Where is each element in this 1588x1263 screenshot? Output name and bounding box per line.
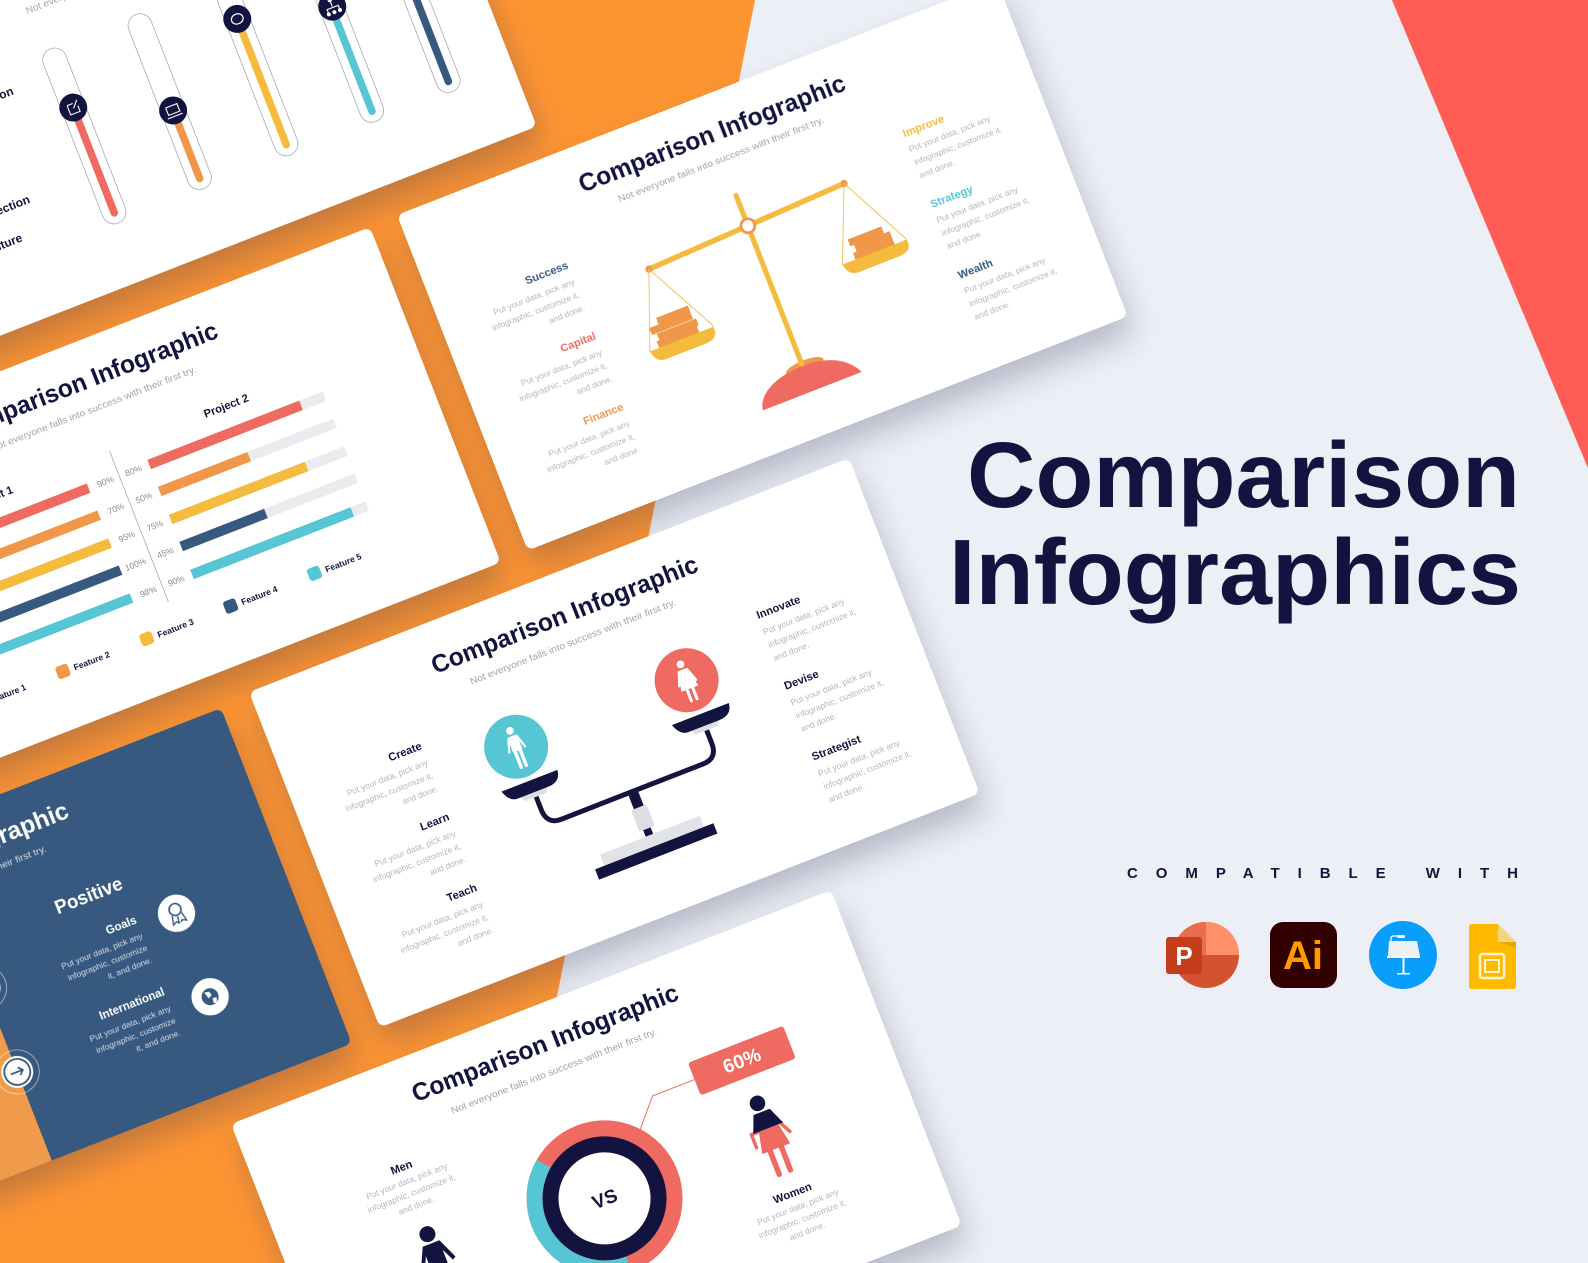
strategy text: Put your data, pick any xyxy=(935,184,1020,225)
panel: positive blue slide xyxy=(0,708,352,1263)
teach text: Teach xyxy=(445,882,479,905)
panel: people balance slide: Not everyone falls into success with their first try. xyxy=(469,597,678,687)
slider 5 xyxy=(373,0,464,96)
icon: woman figure xyxy=(739,1089,803,1178)
panel: coin balance slide xyxy=(397,0,1128,550)
create text: Put your data, pick any xyxy=(345,757,430,798)
create text: infographic, customize it, xyxy=(344,770,434,814)
icon: arrow circle xyxy=(0,1043,46,1100)
icon: globe xyxy=(186,973,234,1021)
project 1 values: 70% xyxy=(106,501,126,516)
slider 1 xyxy=(37,44,131,228)
icon: woman in red circle xyxy=(645,639,728,722)
heading: Comparison Infographic xyxy=(408,979,683,1108)
finance text: Put your data, pick any xyxy=(547,418,632,459)
callout: 60%: 60% xyxy=(720,1044,764,1078)
finance text: Finance xyxy=(582,401,625,428)
teach text: infographic, customize it, xyxy=(399,912,490,955)
legend xyxy=(0,549,363,713)
project 1 values: 95% xyxy=(117,529,137,544)
devise text: infographic, customize it, xyxy=(794,677,885,721)
balance scale xyxy=(501,703,771,901)
men text: and done. xyxy=(397,1194,436,1217)
success text: infographic, customize it, xyxy=(490,290,581,333)
project 2 values: 50% xyxy=(134,490,154,505)
goals text: Goals xyxy=(104,915,139,938)
strategy text xyxy=(929,166,1036,251)
left pan xyxy=(622,255,714,351)
strategy text: infographic, customize it, xyxy=(940,195,1031,238)
innovate text: Put your data, pick any xyxy=(762,596,846,637)
panel: men vs women slide xyxy=(231,890,962,1263)
men text: Put your data, pick any xyxy=(365,1160,450,1201)
learn text: Learn xyxy=(418,811,451,834)
panel: men vs women slide: Not everyone falls into success with their first try. xyxy=(450,1026,659,1117)
title: Comparison xyxy=(967,423,1520,527)
strategist text: Strategist xyxy=(810,733,863,763)
finance text xyxy=(534,401,642,488)
create text xyxy=(332,740,440,827)
teach text: Put your data, pick any xyxy=(400,899,485,940)
coin scale xyxy=(608,143,946,441)
capital text: Capital xyxy=(559,331,598,355)
donut chart xyxy=(504,1097,706,1263)
project 2 values xyxy=(124,463,186,588)
wealth text: and done. xyxy=(973,299,1012,322)
improve text: and done. xyxy=(918,157,956,180)
project 1 values: 98% xyxy=(138,584,158,599)
strategist text: Put your data, pick any xyxy=(817,737,902,778)
project 2 values: 90% xyxy=(166,573,186,588)
icon: Google Slides xyxy=(1469,924,1516,989)
goals text: Put your data, pick any xyxy=(60,930,145,971)
icon: award xyxy=(152,889,201,937)
create text: Create xyxy=(387,740,424,764)
heading: Comparison Infographic xyxy=(575,69,850,199)
icon: PowerPoint: P xyxy=(1175,941,1193,971)
learn text: infographic, customize it, xyxy=(371,841,462,884)
panel: coin balance slide: Not everyone falls into success with their first try. xyxy=(617,115,826,205)
slider 2 xyxy=(123,9,217,194)
panel: people balance slide xyxy=(249,458,980,1027)
improve text xyxy=(901,95,1008,180)
teach text xyxy=(387,882,495,968)
capital text: and done. xyxy=(575,373,614,396)
legend: Feature 5 xyxy=(324,551,363,574)
base xyxy=(784,353,826,379)
wealth text: Put your data, pick any xyxy=(963,255,1047,296)
background: red corner shape xyxy=(1392,0,1588,468)
icon: man in teal circle xyxy=(475,705,558,788)
innovate text xyxy=(755,577,863,663)
men text: Men xyxy=(389,1158,414,1178)
project 1 values: 90% xyxy=(96,474,116,489)
compatible with label: COMPATIBLE WITH xyxy=(1127,865,1518,882)
strategist text: infographic, customize it, xyxy=(822,748,913,791)
improve text: infographic, customize it, xyxy=(912,124,1003,167)
icon: Keynote xyxy=(1369,921,1437,989)
project 1 bars xyxy=(0,483,133,671)
project 2 label: Project 2 xyxy=(202,392,251,421)
title xyxy=(949,423,1521,624)
capital text xyxy=(506,330,614,417)
improve text: Improve xyxy=(901,113,946,140)
project 2 values: 75% xyxy=(145,518,165,533)
slider 4 xyxy=(296,0,390,126)
strategy text: Strategy xyxy=(929,183,976,211)
strategy text: and done. xyxy=(945,228,984,251)
donut chart: VS xyxy=(589,1185,621,1214)
capital text: Put your data, pick any xyxy=(519,347,604,388)
callout: 60% xyxy=(688,1026,796,1095)
innovate text: and done. xyxy=(772,640,811,663)
success text: Success xyxy=(523,260,570,287)
goals text: it, and done. xyxy=(106,955,153,981)
wealth text: infographic, customize it, xyxy=(968,265,1058,309)
connector xyxy=(630,1080,704,1130)
project 2 bars xyxy=(147,392,369,579)
improve text: Put your data, pick any xyxy=(907,113,992,154)
women text: and done. xyxy=(788,1219,827,1243)
success text xyxy=(479,259,587,346)
strategist text xyxy=(810,718,918,804)
icon: Illustrator: Ai xyxy=(1283,934,1323,978)
learn text: Put your data, pick any xyxy=(373,828,458,869)
project 2 values: 45% xyxy=(155,545,175,560)
men text: infographic, customize it, xyxy=(366,1172,457,1215)
legend: Feature 2 xyxy=(72,649,111,672)
positive heading: Positive xyxy=(52,874,126,919)
success text: and done. xyxy=(547,303,586,326)
icon: man figure xyxy=(407,1220,472,1263)
goals text: infographic, customize xyxy=(66,943,149,983)
innovate text: Innovate xyxy=(755,594,802,622)
international text: infographic, customize xyxy=(95,1015,177,1055)
title: Infographics xyxy=(949,520,1521,624)
men text xyxy=(356,1145,462,1227)
wealth text: Wealth xyxy=(956,257,995,282)
legend: Feature 4 xyxy=(240,584,279,607)
women text: Women xyxy=(772,1181,814,1207)
devise text: Devise xyxy=(783,668,821,693)
heading: Comparison Infographic xyxy=(427,550,702,680)
icon: Illustrator xyxy=(1270,922,1337,988)
finance text: and done. xyxy=(602,444,641,467)
learn text xyxy=(360,811,468,897)
finance text: infographic, customize it, xyxy=(545,431,636,474)
legend: Feature 3 xyxy=(156,616,195,640)
international text xyxy=(82,986,182,1068)
project 1 values: 100% xyxy=(123,556,148,573)
icon: PowerPoint xyxy=(1166,922,1239,988)
international text: Put your data, pick any xyxy=(88,1003,173,1044)
learn text: and done. xyxy=(428,854,467,877)
strategist text: and done. xyxy=(827,781,866,804)
slider 3 xyxy=(209,0,303,160)
devise text: and done. xyxy=(799,711,838,734)
success text: Put your data, pick any xyxy=(492,276,577,317)
icon: upper circle xyxy=(0,960,13,1017)
international text: it, and done. xyxy=(135,1027,182,1054)
project 2 values: 80% xyxy=(124,463,143,478)
goals text xyxy=(54,914,154,996)
panel: project bars slide xyxy=(0,227,501,796)
women text xyxy=(747,1171,853,1253)
background: orange shape xyxy=(0,0,755,1263)
devise text xyxy=(783,647,890,734)
women text: Put your data, pick any xyxy=(756,1186,841,1227)
project 1 values xyxy=(91,474,159,601)
panel: slider comparison slide xyxy=(0,0,537,360)
international text: International xyxy=(98,986,166,1023)
labels xyxy=(0,84,66,260)
capital text: infographic, customize it, xyxy=(518,360,609,404)
devise text: Put your data, pick any xyxy=(789,667,874,708)
women text: infographic, customize it, xyxy=(757,1197,848,1241)
innovate text: infographic, customize it, xyxy=(767,606,857,650)
create text: and done. xyxy=(401,783,440,806)
wealth text xyxy=(956,237,1064,322)
right pan xyxy=(815,170,907,265)
teach text: and done. xyxy=(456,925,495,948)
